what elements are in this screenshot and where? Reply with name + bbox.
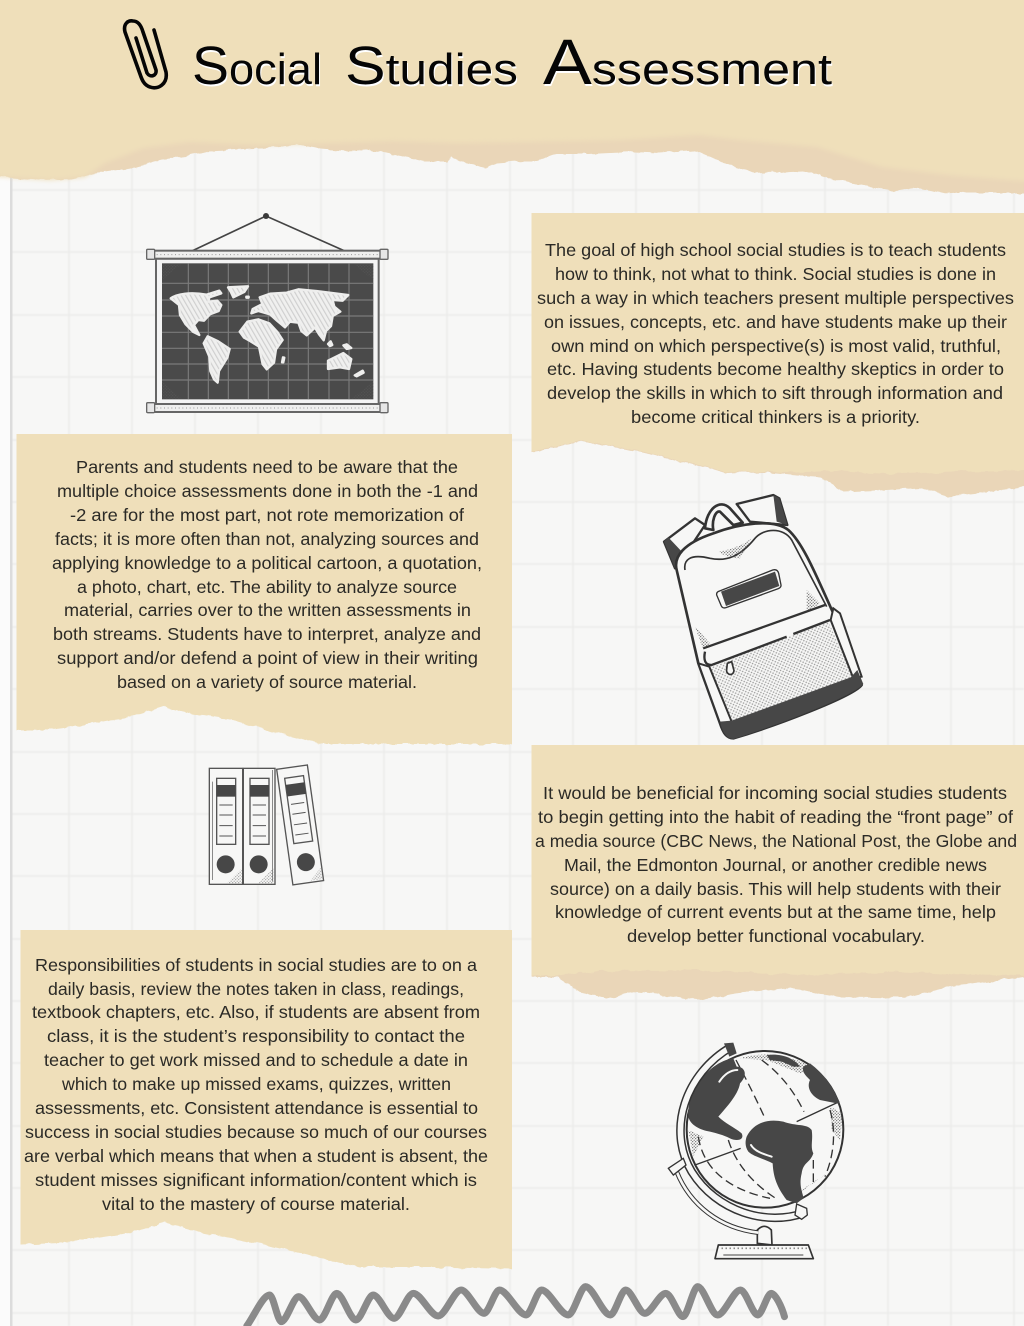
panel text: class, it is the student’s responsibility to contact the <box>47 1026 465 1046</box>
panel: responsibilities of students <box>10 920 525 1269</box>
panel text: Mail, the Edmonton Journal, or another credible news <box>564 855 987 875</box>
panel text: own mind on which perspective(s) is most valid, truthful, <box>551 336 1001 356</box>
panel text: -2 are for the most part, not rote memorization of <box>70 505 464 525</box>
top roller <box>154 251 381 259</box>
panel text: material, carries over to the written assessments in <box>64 600 471 620</box>
panel text: how to think, not what to think. Social studies is done in <box>555 264 996 284</box>
panel text: support and/or defend a point of view in their writing <box>57 648 478 668</box>
panel text: develop better functional vocabulary. <box>627 926 925 946</box>
map frame <box>156 259 379 405</box>
title: Studies <box>345 36 518 96</box>
panel text: teacher to get work missed and to schedule a date in <box>44 1050 468 1070</box>
axis line <box>695 1102 839 1165</box>
panel text: knowledge of current events but at the same time, help <box>555 902 996 922</box>
title: Assessment <box>543 26 832 98</box>
panel text: become critical thinkers is a priority. <box>631 407 920 427</box>
pocket <box>708 622 853 722</box>
panel text: multiple choice assessments done in both the -1 and <box>57 481 478 501</box>
land masses <box>688 1055 840 1203</box>
title <box>192 26 832 98</box>
panel: goal of social studies <box>520 205 1024 496</box>
icon: hanging world map <box>147 213 388 413</box>
panel text: develop the skills in which to sift through information and <box>547 383 1003 403</box>
panel text: source) on a daily basis. This will help students with their <box>550 879 1001 899</box>
panel text: applying knowledge to a political cartoon, a quotation, <box>52 553 482 573</box>
land highlights <box>719 1070 772 1157</box>
binder 1 <box>209 768 243 884</box>
panel text: are verbal which means that when a student is absent, the <box>24 1146 488 1166</box>
panel text <box>52 457 482 692</box>
panel: reading the front page <box>520 735 1024 1000</box>
stand base <box>757 1226 772 1245</box>
decorative squiggle <box>247 1287 784 1326</box>
panel text: student misses significant information/content which is <box>35 1170 477 1190</box>
panel text: such a way in which teachers present multiple perspectives <box>537 288 1014 308</box>
panel text <box>537 240 1014 427</box>
panel text <box>535 783 1017 946</box>
sphere <box>687 1051 843 1208</box>
icon: desk globe <box>668 1043 843 1259</box>
straps <box>664 518 705 568</box>
panel: multiple choice assessments <box>5 425 525 744</box>
binder 2 <box>243 768 275 884</box>
lower support arm <box>677 1172 758 1233</box>
meridian arm <box>680 1047 805 1218</box>
panel text: daily basis, review the notes taken in class, readings, <box>48 979 464 999</box>
name tag <box>717 570 781 608</box>
body <box>676 523 862 738</box>
dashed meridians <box>698 1060 834 1200</box>
panel text: facts; it is more often than not, analyzing sources and <box>55 529 479 549</box>
panel text <box>24 955 488 1214</box>
panel text: assessments, etc. Consistent attendance is essential to <box>35 1098 478 1118</box>
header torn paper banner <box>0 0 1024 193</box>
bottom roller <box>154 404 381 412</box>
icon: three binders <box>209 765 324 885</box>
panel text: a photo, chart, etc. The ability to analyze source <box>77 577 457 597</box>
side pockets <box>698 663 732 723</box>
panel text: to begin getting into the habit of reading the “front page” of <box>538 807 1013 827</box>
panel text: which to make up missed exams, quizzes, written <box>61 1074 451 1094</box>
icon: paperclip <box>125 21 166 88</box>
panel text: The goal of high school social studies is to teach students <box>545 240 1006 260</box>
panel text: a media source (CBC News, the National Post, the Globe and <box>535 831 1017 851</box>
zipper pull <box>727 662 734 674</box>
panel text: Responsibilities of students in social studies are to on a <box>35 955 477 975</box>
binder 3 <box>277 765 324 885</box>
panel text: etc. Having students become healthy skeptics in order to <box>547 359 1004 379</box>
panel text: both streams. Students have to interpret, analyze and <box>53 624 481 644</box>
hanger cord <box>193 216 344 251</box>
title: Social <box>192 36 322 96</box>
handle <box>705 504 743 530</box>
panel text: It would be beneficial for incoming social studies students <box>543 783 1007 803</box>
bottom panel <box>720 670 863 739</box>
continents <box>171 286 364 383</box>
panel text: vital to the mastery of course material. <box>102 1194 410 1214</box>
panel text: textbook chapters, etc. Also, if students are absent from <box>32 1002 480 1022</box>
panel text: success in social studies because so much of our courses <box>25 1122 487 1142</box>
panel text: Parents and students need to be aware that the <box>76 457 458 477</box>
panel text: on issues, concepts, etc. and have students make up their <box>544 312 1007 332</box>
panel text: based on a variety of source material. <box>117 672 417 692</box>
icon: backpack <box>664 495 863 739</box>
